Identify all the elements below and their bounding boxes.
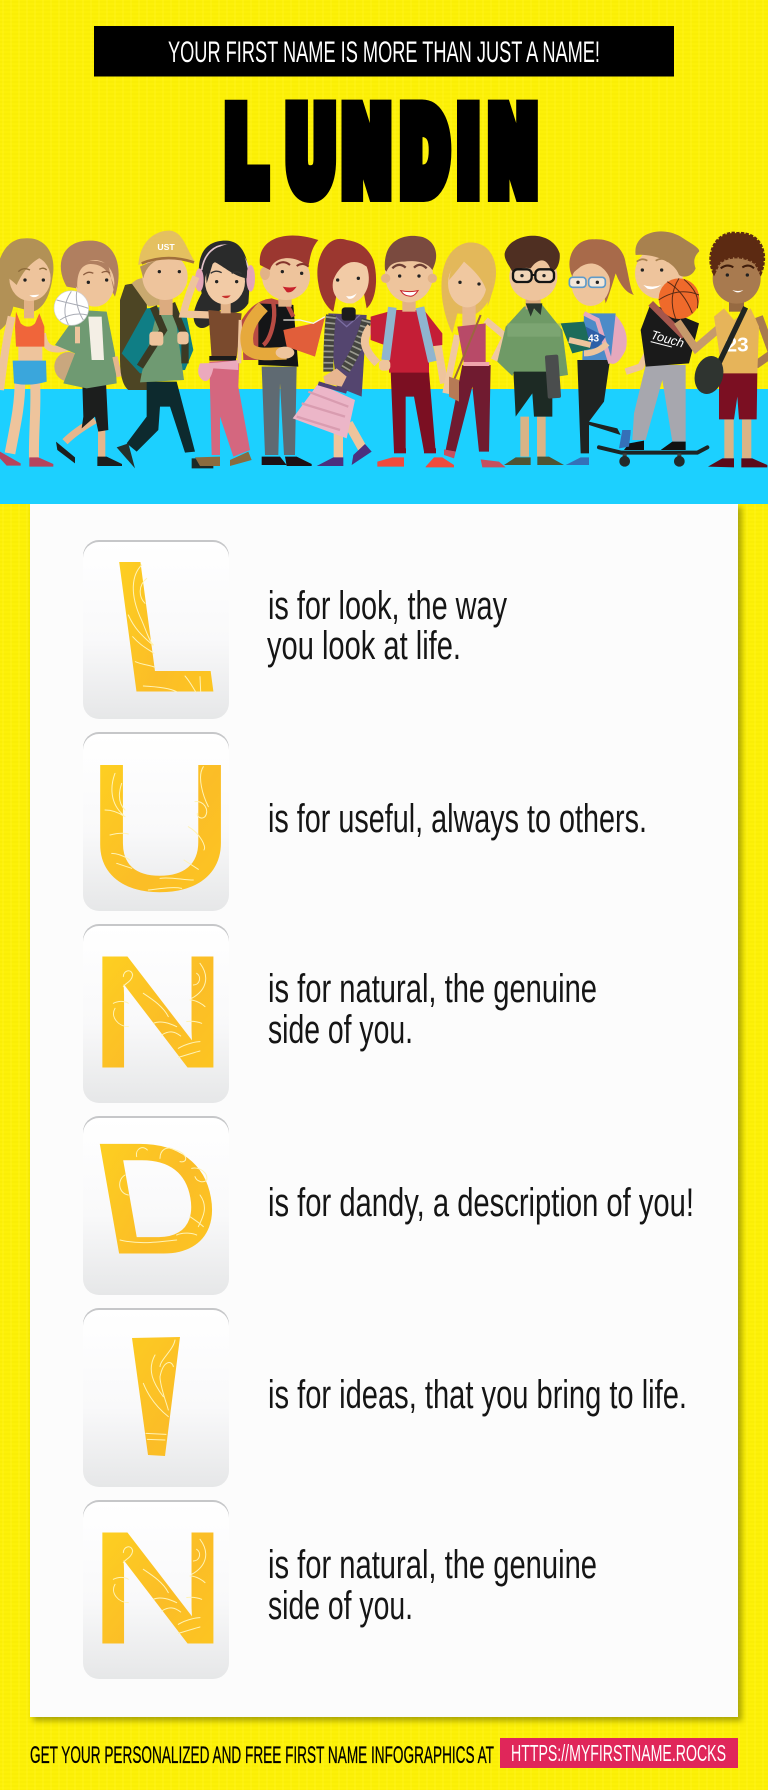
tile: letter L: L — [105, 528, 220, 727]
person: girl with ponytail and tablet — [561, 239, 634, 465]
person: hiker with backpack and cap: UST — [157, 242, 175, 252]
person: girl with orange top — [0, 238, 80, 467]
text: L line: is for look, the way — [268, 584, 507, 628]
tile: letter I: I — [90, 1291, 240, 1512]
row 1: L — [83, 528, 507, 727]
text: N line: is for natural, the genuine — [268, 1543, 597, 1587]
person: hiker with backpack and cap — [117, 231, 213, 468]
tile: letter N: N — [90, 927, 226, 1098]
tagline bar — [94, 26, 674, 76]
panel shadow — [33, 507, 742, 1721]
illustration: group of young people, left half — [0, 231, 376, 468]
tile: letter D: D — [84, 1113, 231, 1284]
person: girl with headphones — [183, 241, 255, 466]
row 3: N — [83, 924, 597, 1103]
row 5: I — [83, 1308, 684, 1487]
person: boy with orange book — [242, 235, 325, 466]
text: N line — [268, 967, 597, 1052]
person: boy with tank top and shoulder bag: 23 — [726, 334, 749, 357]
white panel — [30, 504, 738, 1717]
person: girl with pink bag — [293, 239, 376, 466]
person: girl with volleyball — [54, 241, 122, 466]
person: boy with red shirt and blue backpack straps — [365, 236, 454, 467]
person: boy with tank top and shoulder bag — [690, 233, 768, 467]
text: L line — [267, 584, 507, 668]
illustration: group of young people, right half — [365, 231, 768, 467]
text: L line: you look at life. — [267, 624, 461, 668]
person: girl with ponytail and tablet: 43 — [588, 334, 600, 345]
tile: letter U: U — [86, 727, 235, 927]
person: skater with basketball: Touch — [649, 328, 686, 351]
text: N line: side of you. — [268, 1584, 413, 1628]
person: blonde girl — [441, 242, 506, 467]
text: N line: side of you. — [268, 1008, 413, 1052]
text: N line — [268, 1543, 597, 1628]
row 6: N — [83, 1500, 597, 1679]
title: name: LUNDIN — [227, 89, 535, 214]
row 4: D — [83, 1113, 694, 1295]
person: boy with glasses and green sweater — [497, 236, 568, 465]
text: N line: is for natural, the genuine — [268, 967, 597, 1011]
row 2: U — [83, 727, 647, 927]
blue band lip over shadow — [0, 480, 768, 504]
blue floor band — [0, 389, 768, 504]
tile: letter N: N — [90, 1503, 226, 1674]
person: skater with basketball — [599, 231, 719, 467]
